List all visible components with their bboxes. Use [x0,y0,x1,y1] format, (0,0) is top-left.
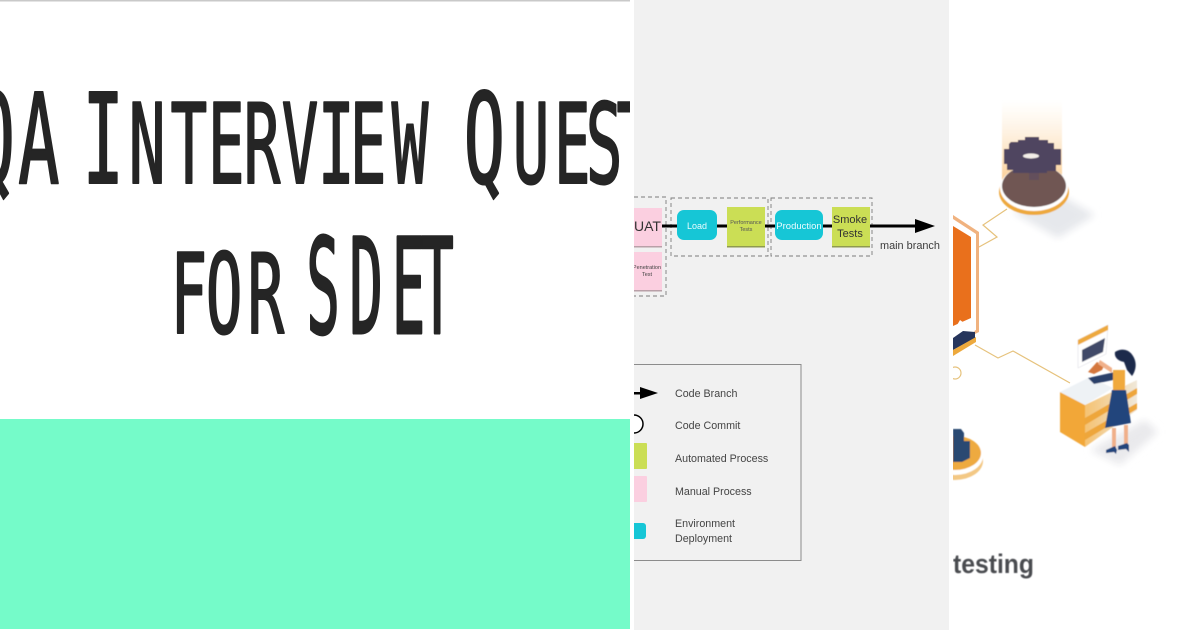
sticky: penetration test: Penetration [633,265,661,271]
sticky: performance tests: Tests [740,227,753,233]
sticky: UAT: UAT [634,218,661,234]
legend: environment deployment [634,519,735,544]
legend: manual process [625,476,752,502]
environment: Production [775,210,823,240]
monitor side panel [953,215,979,356]
sticky: smoke tests [832,207,870,248]
sticky: smoke tests: Smoke [833,214,867,226]
legend: manual process: Manual Process [675,486,752,498]
sticky: performance tests: Performance [730,220,762,226]
label: main branch: main branch [880,240,940,252]
caption: testing: testing [953,549,1034,579]
dashed stage boxes [620,197,872,296]
sticky: UAT [634,208,662,248]
icon: glowing gear on disc [998,112,1092,238]
legend: environment deployment: Deployment [675,533,732,545]
illustration: woman at desk [1060,325,1158,465]
legend: code commit: Code Commit [675,420,740,432]
environment: Load [677,210,717,240]
title: second line: SDET [306,210,454,364]
legend: automated process: Automated Process [675,453,768,465]
mint colour block [0,419,630,629]
legend: automated process [625,443,768,469]
environment: Load: Load [687,221,707,231]
legend: environment deployment: Environment [675,518,735,530]
main branch arrow [660,219,935,233]
sticky: penetration test [634,252,662,292]
connector lines [949,209,1070,383]
legend: code branch: Code Branch [675,388,737,400]
legend [620,364,801,560]
title: second line [176,234,454,336]
panel: CI/CD pipeline diagram [620,0,950,630]
sticky: performance tests [727,207,765,248]
legend: code commit [625,415,740,433]
environment: Production: Production [776,221,822,232]
title: second line: FOR [171,231,284,360]
panel: testing illustration [953,112,1156,580]
legend: code branch [634,387,737,399]
icon: blue gear on disc [953,428,984,481]
sticky: smoke tests: Tests [837,228,863,240]
panel: QA interview title card [0,0,653,630]
sticky: penetration test: Test [642,272,653,278]
